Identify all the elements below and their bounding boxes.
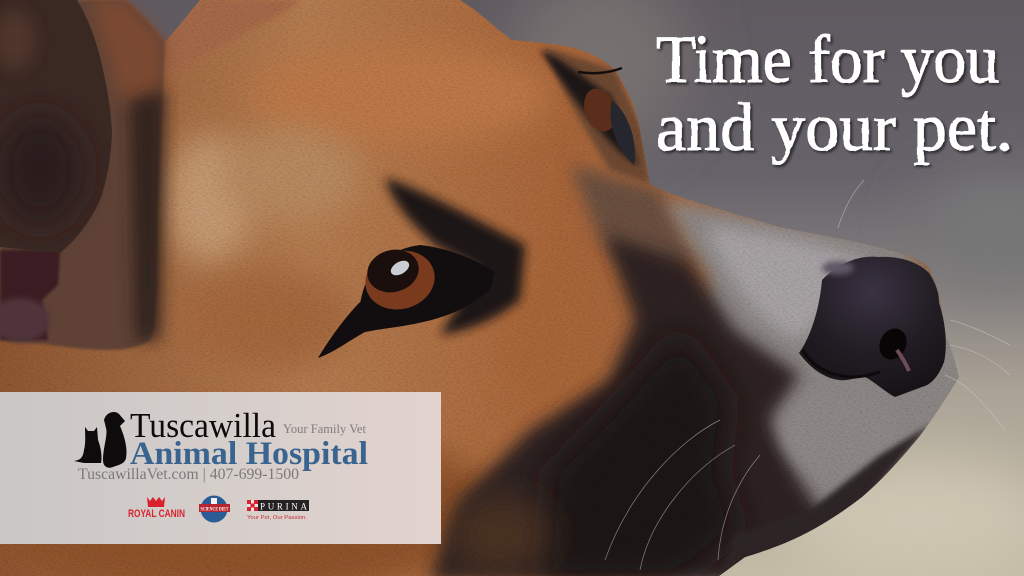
logo wordmark: Animal Hospital: Animal Hospital xyxy=(130,436,368,472)
upper far eye xyxy=(540,50,638,165)
icon: dog and cat silhouette logo xyxy=(74,412,127,468)
logo: Royal Canin: ROYAL CANIN xyxy=(128,508,185,520)
snout grey base xyxy=(660,200,985,576)
title lettering xyxy=(656,21,1013,165)
title lettering: Time for you xyxy=(656,21,999,97)
pale fur behind cheek xyxy=(165,135,255,265)
ear back collar xyxy=(0,0,165,350)
chin shadow xyxy=(720,425,930,576)
back ear tip xyxy=(174,0,294,42)
left ear xyxy=(0,0,165,350)
ear inner pink shadow xyxy=(0,250,60,340)
main eye xyxy=(318,243,495,358)
title lettering: and your pet. xyxy=(656,89,1013,165)
title: Time for you and your pet. xyxy=(656,21,1015,167)
nose xyxy=(799,257,946,397)
ear flap xyxy=(0,0,112,253)
black muzzle core xyxy=(540,330,740,576)
eye lower lid xyxy=(318,272,495,358)
website and phone: TuscawillaVet.com | 407-699-1500 xyxy=(78,466,299,483)
logo tagline: Your Family Vet xyxy=(283,421,366,436)
logo: Royal Canin xyxy=(128,497,185,520)
forehead light orange xyxy=(250,45,550,145)
panel: hospital branding xyxy=(0,392,441,544)
whiskers xyxy=(605,180,1010,570)
brown transition on lower muzzle xyxy=(450,495,550,575)
logo: Purina xyxy=(247,500,309,521)
eye socket xyxy=(360,245,495,320)
title shadow: and your pet. xyxy=(658,91,1015,167)
dark muzzle patch xyxy=(430,235,830,576)
logo: Science Diet: SCIENCE DIET xyxy=(200,506,229,512)
logo: Purina: Your Pet, Our Passion. xyxy=(247,515,308,521)
brown bridge of muzzle xyxy=(570,165,700,280)
grey chin xyxy=(774,425,804,470)
eyebrow dark patch xyxy=(385,178,525,335)
lower cheek orange-brown xyxy=(18,442,482,576)
title shadow: Time for you xyxy=(658,23,1001,99)
title shadow xyxy=(658,23,1015,167)
grey snout highlight xyxy=(705,225,870,340)
logo: Purina: PURINA xyxy=(260,502,308,512)
far brow rim xyxy=(545,47,650,184)
logo: Science Diet xyxy=(199,496,230,522)
logo wordmark: Tuscawilla: Tuscawilla xyxy=(130,406,276,445)
